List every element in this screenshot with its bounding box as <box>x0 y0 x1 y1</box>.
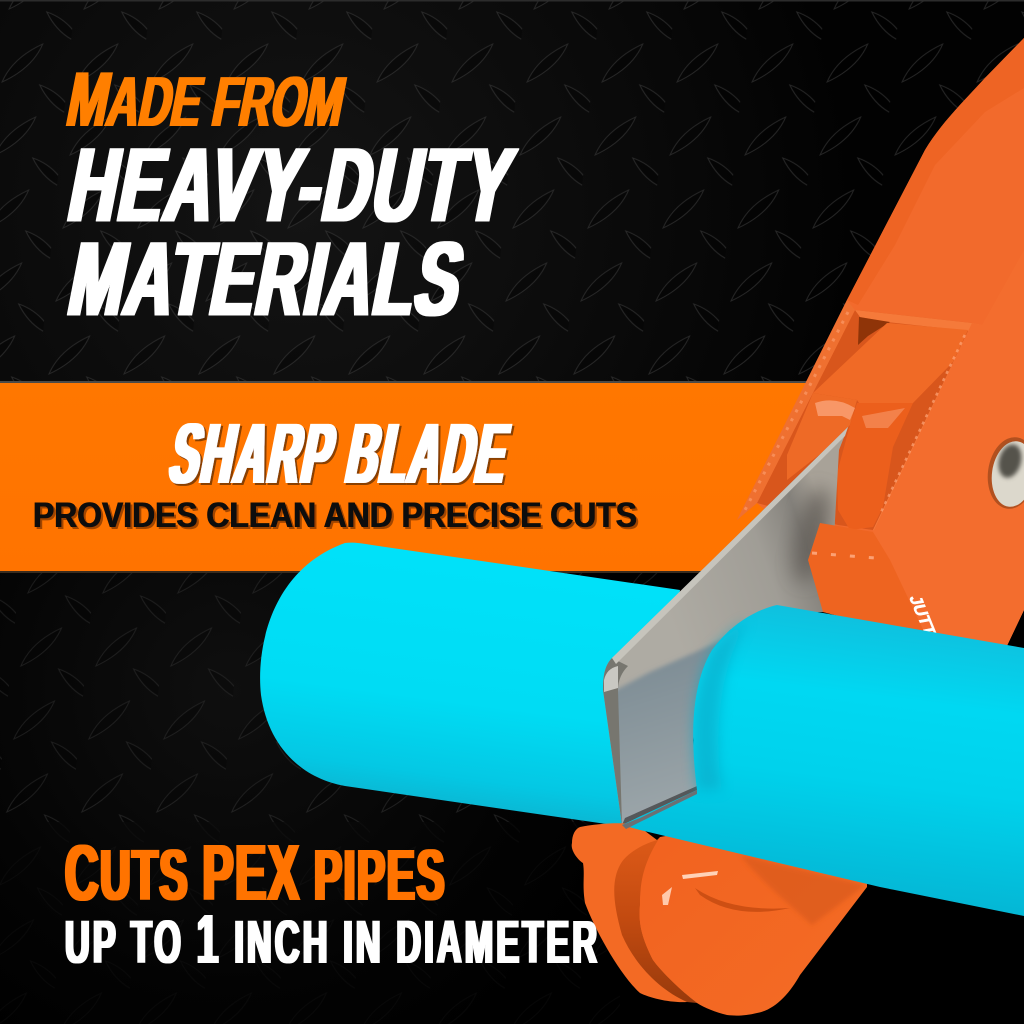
jaw shadow under pipe <box>740 855 865 925</box>
frame speckle <box>880 335 965 515</box>
handle bevel <box>847 38 1024 305</box>
jaw groove <box>614 837 697 1003</box>
blade dark patch <box>786 485 838 585</box>
front face <box>873 250 1024 650</box>
banner heading: sharp blade: SHARP BLADE <box>163 406 516 502</box>
block highlight <box>812 553 875 558</box>
pipe: right section <box>622 605 1024 916</box>
pipe: left section <box>260 543 680 832</box>
lower handle block <box>808 523 928 640</box>
caption: cuts pex pipes: CUTS PEX PIPES <box>65 828 444 917</box>
roller upper face <box>813 323 968 420</box>
bolt <box>983 434 1024 512</box>
heading: materials: MATERIALS <box>61 220 473 338</box>
pipe cut shading <box>693 620 748 790</box>
roller right lobe <box>837 403 913 530</box>
orange banner <box>0 381 830 573</box>
blade shading <box>612 485 838 830</box>
window recess <box>757 310 972 530</box>
blade top edge <box>612 427 848 664</box>
window shadow <box>858 317 890 345</box>
tool: upper handle <box>737 38 1024 650</box>
blade lower section <box>618 639 720 824</box>
brand mark: JUTT <box>905 594 941 637</box>
jaw left lobe <box>572 823 687 1002</box>
heading: made from: MADE FROM <box>61 55 353 143</box>
roller highlights <box>815 400 855 420</box>
blade tip <box>622 790 697 829</box>
window lip <box>855 310 972 331</box>
caption: up to 1 inch in diameter: UP TO 1 INCH IN DIAMETER <box>65 901 597 979</box>
blade <box>603 427 848 830</box>
tool: lower jaw <box>572 823 867 1016</box>
heading: heavy-duty: HEAVY-DUTY <box>61 126 522 244</box>
roller left lobe <box>787 393 857 480</box>
jaw highlights <box>682 871 718 879</box>
banner subtext: PROVIDES CLEAN AND PRECISE CUTS <box>33 496 637 535</box>
blade bevel <box>603 658 628 825</box>
frame strip <box>737 300 855 520</box>
jaw right lobe <box>640 830 867 1016</box>
handle body <box>737 38 1024 650</box>
